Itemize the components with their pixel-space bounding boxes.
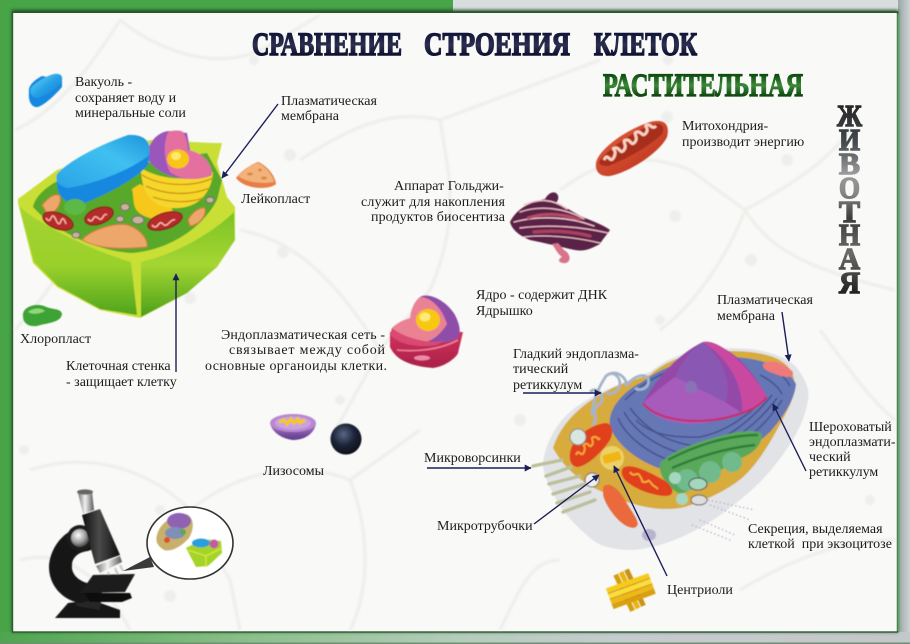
arrow: microtubules (534, 475, 599, 524)
mitochondria in cell (40, 203, 185, 234)
label: lysosomes: Лизосомы (263, 464, 325, 479)
label: cell wall: - защищает клетку (66, 375, 177, 390)
outer cell body (543, 348, 809, 550)
heading: animal cell (vertical): Я (839, 265, 860, 300)
heading: animal cell (vertical): Т (839, 194, 860, 229)
heading: animal cell (vertical): А (839, 241, 861, 276)
heading: plant cell: РАСТИТЕЛЬНАЯ (603, 68, 803, 104)
label: cell wall: Клеточная стенка (66, 359, 171, 374)
label: nucleus: Ядрышко (476, 304, 533, 319)
vesicles (72, 197, 214, 238)
label: vacuole: сохраняет воду и (75, 91, 177, 106)
heading: animal cell (vertical) (837, 98, 862, 300)
red vesicles (603, 485, 638, 528)
green golgi (660, 431, 762, 494)
label: endoplasmic reticulum: Эндоплазматическая сеть - (221, 328, 385, 343)
golgi stack (141, 168, 213, 208)
label: secretion: Секреция, выделяемая (748, 522, 883, 537)
eyepiece (78, 491, 94, 514)
rough ER (610, 357, 796, 474)
golgi tail (552, 243, 570, 263)
arrow: centrioles (614, 466, 667, 576)
mini plant cell (186, 538, 222, 567)
title: КЛЕТОК (594, 27, 697, 63)
focus knob (71, 529, 89, 547)
arrow: plasma membrane (plant) (222, 104, 278, 178)
label: endoplasmic reticulum (205, 328, 387, 374)
heading: animal cell (vertical): И (839, 122, 860, 157)
title (252, 27, 697, 63)
vacuole (57, 136, 149, 204)
cell floor (33, 153, 222, 253)
pillar (76, 592, 102, 610)
stage (80, 574, 135, 593)
icon: mitochondrion (596, 121, 668, 176)
arrow: cell wall (175, 274, 177, 372)
yellow ER (132, 184, 173, 220)
leucoplasts (82, 224, 147, 248)
nosepiece (96, 556, 122, 573)
label: chloroplast: Хлоропласт (20, 332, 91, 347)
arrow: microvilli (427, 467, 531, 469)
animal cell diagram (533, 342, 809, 550)
left wall panel (19, 206, 137, 315)
heading: animal cell (vertical): Н (839, 217, 860, 252)
label: secretion: клеткой при экзоцитозе (748, 537, 892, 552)
label: plasma membrane animal: Плазматическая (717, 293, 813, 308)
label: microvilli: Микроворсинки (424, 451, 521, 466)
plant cell diagram (18, 130, 235, 318)
icon: golgi apparatus (510, 192, 610, 263)
centrosome (600, 446, 624, 470)
cytoplasm (553, 351, 795, 509)
nucleus (643, 342, 767, 423)
arrow: smooth ER (523, 392, 601, 394)
label: rough ER: ретиккулум (809, 465, 878, 480)
secretion dots (692, 500, 755, 540)
label: smooth ER: ретиккулум (513, 378, 582, 393)
background: faint tissue dots (19, 55, 875, 602)
label: centrioles: Центриоли (667, 583, 733, 598)
title: СРАВНЕНИЕ (252, 27, 402, 63)
label: vacuole: Вакуоль - (75, 75, 132, 90)
label: vacuole: минеральные соли (75, 106, 186, 121)
label: golgi: Аппарат Гольджи- (394, 179, 504, 194)
small vesicles (570, 429, 586, 445)
icon: dark vesicle (330, 424, 362, 454)
icon: chloroplast (23, 305, 62, 326)
title: СТРОЕНИЯ (424, 27, 570, 63)
label: endoplasmic reticulum: основные органоиды клетки. (205, 359, 387, 374)
label: plasma membrane animal: мембрана (717, 309, 776, 324)
icon: leucoplast (236, 162, 276, 188)
label: golgi: продуктов биосентиза (371, 210, 506, 225)
heading: animal cell (vertical): В (839, 146, 860, 181)
smooth ER (590, 373, 649, 425)
tube (82, 509, 120, 564)
label: rough ER: Шероховатый (809, 420, 892, 435)
icon: microscope (49, 489, 135, 618)
right wall panel (141, 212, 235, 317)
base (55, 600, 120, 618)
label: mitochondrion: Митохондрия- (682, 119, 769, 134)
label: rough ER: эндоплазмати- (809, 435, 896, 450)
heading: animal cell (vertical): Ж (837, 98, 862, 133)
label: microtubules: Микротрубочки (437, 519, 533, 534)
label: plasma membrane plant: мембрана (281, 109, 340, 124)
label: smooth ER: тический (513, 362, 569, 377)
label: leucoplast: Лейкопласт (241, 192, 310, 207)
label: smooth ER: Гладкий эндоплазма- (513, 347, 639, 362)
nucleus (147, 131, 212, 179)
label: plasma membrane plant: Плазматическая (281, 94, 377, 109)
icon: vacuole (29, 74, 62, 107)
cell wall outline (18, 140, 235, 318)
arrow: plasma membrane (animal) (782, 312, 789, 361)
icon: centriole (606, 568, 656, 612)
label: mitochondrion: производит энергию (682, 135, 804, 150)
label: golgi (361, 179, 506, 225)
label: nucleus: Ядро - содержит ДНК (476, 288, 608, 303)
icon: lysosome (270, 414, 316, 440)
mitochondria (570, 423, 612, 467)
icon: nucleus (390, 296, 463, 368)
magnifier bubble with mini cells (123, 507, 233, 579)
label: rough ER: ческий (809, 450, 851, 465)
chloroplast in cell (64, 199, 86, 215)
microvilli (533, 460, 595, 512)
C arm (49, 526, 100, 603)
label: endoplasmic reticulum: связывает между собой (229, 343, 386, 358)
label: golgi: служит для накопления (361, 195, 506, 210)
heading: animal cell (vertical): О (839, 170, 860, 205)
mini animal cell (156, 513, 193, 550)
arrow: rough ER (773, 404, 806, 471)
